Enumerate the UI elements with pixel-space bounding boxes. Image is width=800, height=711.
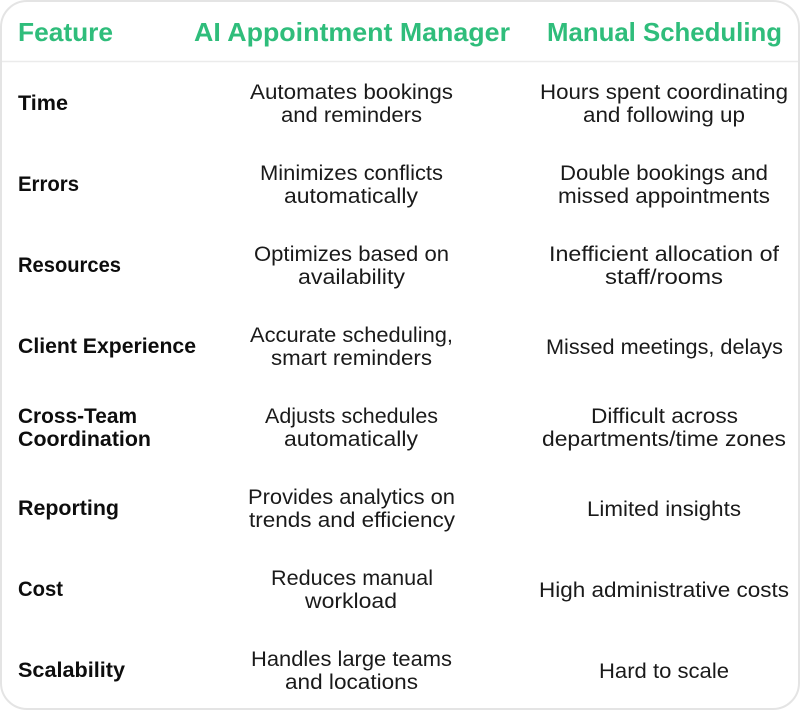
row: Reporting: trends and efficiency: [249, 508, 455, 532]
row: Client Experience: Missed meetings, delays: [546, 335, 783, 359]
row: Time: Automates bookings: [250, 80, 453, 104]
row: Resources: [18, 242, 779, 289]
row: Cross-Team Coordination: departments/time zones: [542, 427, 786, 451]
row: Cost: Cost: [18, 578, 63, 601]
row: Errors: Errors: [18, 173, 79, 196]
row: Scalability: [18, 647, 729, 694]
row: Cost: High administrative costs: [539, 578, 789, 602]
header row: Manual Scheduling: [547, 17, 782, 47]
row: Resources: Optimizes based on: [254, 242, 449, 266]
row: Resources: Resources: [18, 254, 121, 277]
row: Reporting: Limited insights: [587, 497, 741, 521]
row: Cross-Team Coordination: [18, 404, 786, 451]
row: Errors: automatically: [284, 184, 418, 208]
header row: Feature: [18, 17, 113, 47]
row: Cross-Team Coordination: Adjusts schedules: [265, 404, 438, 428]
row: Reporting: Reporting: [18, 497, 119, 520]
row: Cross-Team Coordination: Cross-Team: [18, 405, 137, 428]
row: Errors: missed appointments: [558, 184, 770, 208]
row: Client Experience: smart reminders: [271, 346, 432, 370]
row: Cost: Reduces manual: [271, 566, 433, 590]
row: Cross-Team Coordination: Difficult across: [591, 404, 738, 428]
row: Scalability: and locations: [285, 670, 418, 694]
row: Time: Hours spent coordinating: [540, 80, 788, 104]
row: Scalability: Handles large teams: [251, 647, 452, 671]
row: Time: and reminders: [281, 103, 422, 127]
row: Scalability: Scalability: [18, 659, 125, 682]
row: Errors: [18, 161, 770, 208]
row: Cost: [18, 566, 789, 613]
row: Errors: Double bookings and: [560, 161, 768, 185]
row: Reporting: Provides analytics on: [248, 485, 455, 509]
header row: AI Appointment Manager: [194, 17, 510, 47]
row: Errors: Minimizes conflicts: [260, 161, 443, 185]
row: Client Experience: [18, 323, 783, 370]
row: Scalability: Hard to scale: [599, 659, 729, 683]
row: Cross-Team Coordination: Coordination: [18, 428, 151, 451]
row: Client Experience: Client Experience: [18, 335, 196, 358]
row: Time: [18, 80, 788, 127]
row: Resources: Inefficient allocation of: [549, 242, 779, 266]
row: Client Experience: Accurate scheduling,: [250, 323, 453, 347]
row: Reporting: [18, 485, 741, 532]
row: Resources: availability: [298, 265, 405, 289]
header row: [18, 17, 782, 47]
row: Resources: staff/rooms: [605, 265, 723, 289]
row: Time: Time: [18, 92, 68, 115]
row: Cost: workload: [304, 589, 397, 613]
row: Cross-Team Coordination: automatically: [284, 427, 418, 451]
row: Time: and following up: [583, 103, 745, 127]
